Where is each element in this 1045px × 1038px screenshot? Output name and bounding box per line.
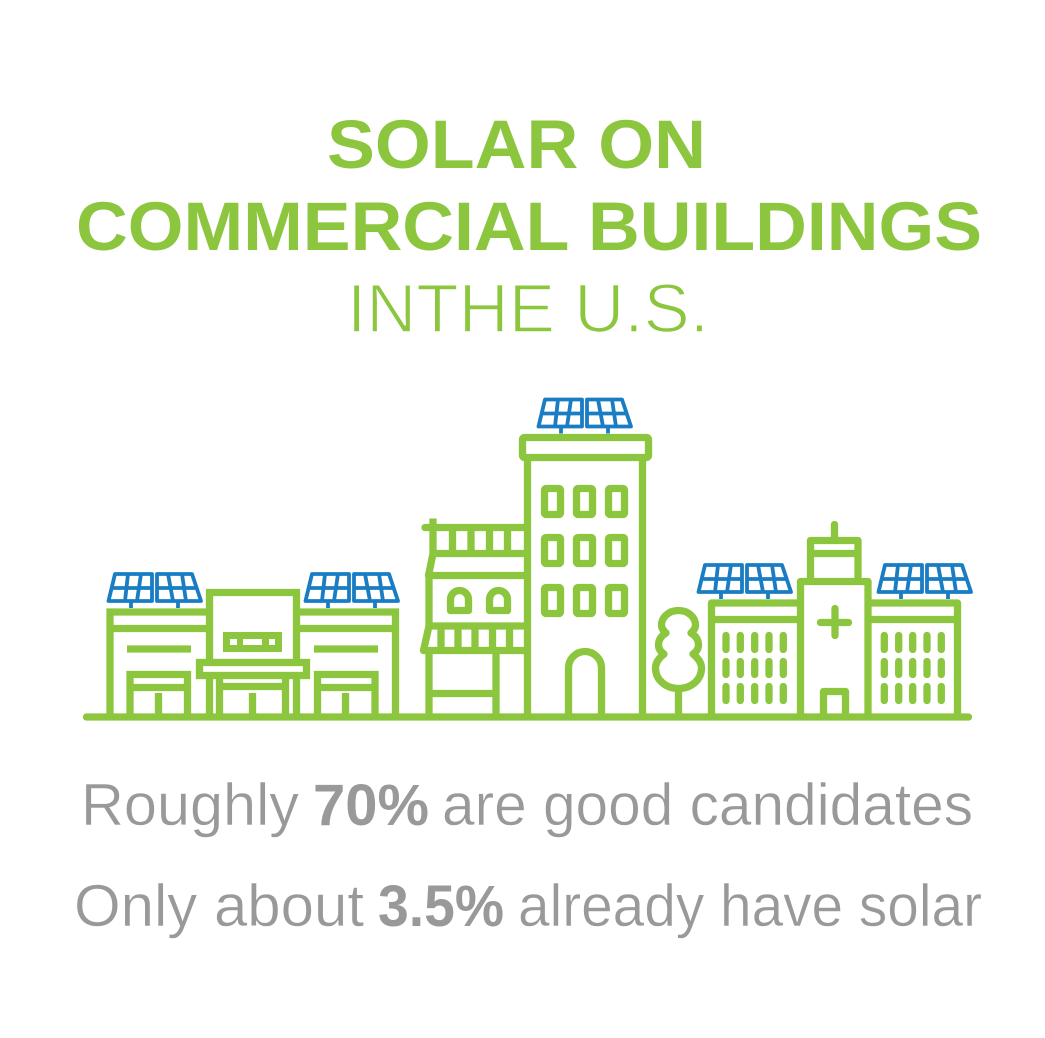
stat: good candidates xyxy=(81,772,973,838)
title line 3: INTHE U.S. xyxy=(347,270,709,347)
stat: already have solar: 3.5% xyxy=(378,874,504,939)
stat: already have solar: Only about xyxy=(74,873,364,939)
stat: good candidates: 70% xyxy=(313,773,429,838)
solar panels: tower xyxy=(538,400,631,434)
low-rise shop building xyxy=(424,518,527,717)
stat: good candidates: Roughly xyxy=(81,772,300,838)
strip mall xyxy=(110,592,396,717)
solar panels: hospital right xyxy=(878,565,971,599)
title xyxy=(76,106,982,347)
stat: already have solar: already have solar xyxy=(518,873,982,939)
title line 1: SOLAR ON xyxy=(327,106,706,183)
stat: already have solar xyxy=(74,873,982,939)
illustration: city skyline with solar panels xyxy=(86,400,971,717)
strip mall sign xyxy=(223,632,282,652)
solar panels: strip mall left xyxy=(108,574,201,608)
hospital xyxy=(712,524,958,717)
tree xyxy=(656,610,702,717)
tower xyxy=(522,438,648,717)
stat: good candidates: are good candidates xyxy=(442,772,973,838)
solar panels: strip mall right xyxy=(306,574,398,608)
title line 2: COMMERCIAL BUILDINGS xyxy=(76,188,982,265)
ground line xyxy=(86,713,968,721)
hospital windows xyxy=(726,636,941,700)
solar panels: hospital left xyxy=(698,565,791,599)
